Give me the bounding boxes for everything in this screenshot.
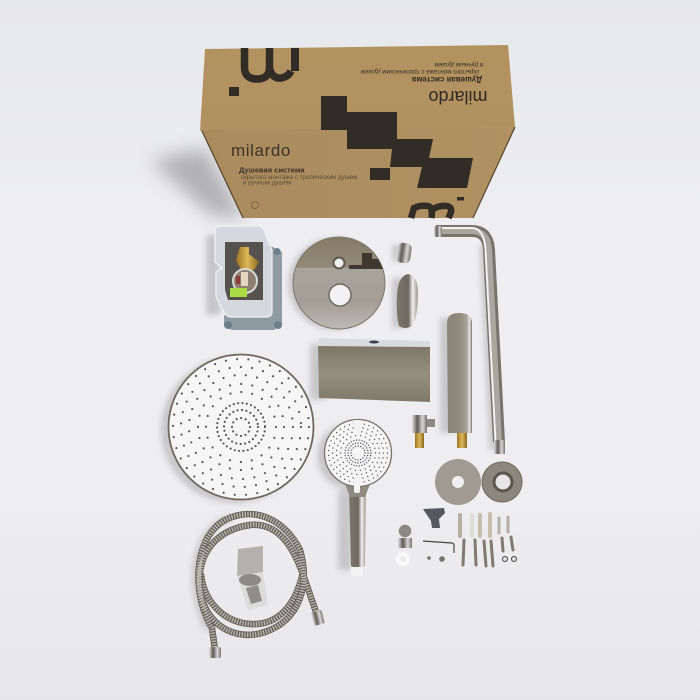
holder chrome reflection: [246, 585, 262, 604]
center plate hole: [329, 284, 351, 306]
plate disc: [293, 237, 385, 329]
mixer handle: [397, 274, 418, 328]
product description second line on flap: и ручным душем: [435, 61, 483, 68]
elbow outlet: [427, 419, 435, 427]
product description on front: скрытого монтажа с тропическим душем: [241, 174, 357, 181]
hand shower wall holder: [237, 546, 268, 610]
pixel pattern on box: [321, 96, 473, 188]
holder body: [237, 572, 268, 610]
plate disc: [435, 459, 481, 505]
wall panel: [318, 338, 430, 402]
box side edges: [202, 127, 515, 218]
small set screw: [427, 556, 431, 560]
pixel square: [370, 168, 390, 180]
corner tabs: [224, 248, 282, 329]
arm tip: [434, 226, 442, 237]
mounting base: [224, 246, 282, 330]
arm mid tone: [436, 231, 499, 442]
head disc: [168, 354, 314, 500]
flange opening: [494, 473, 512, 491]
ball: [398, 524, 412, 538]
slide bar brass nipple: [457, 433, 467, 448]
green level sticker: [230, 288, 247, 297]
product description on flap: скрытого монтажа с тропическим душем: [361, 68, 479, 75]
aerator key: [423, 508, 445, 528]
hand shower tip: [351, 567, 363, 576]
top tab: [354, 420, 360, 434]
hose corrugation: [198, 514, 316, 650]
panel chrome top edge: [318, 338, 430, 348]
hose inner coil corrugation: [201, 572, 303, 624]
wall anchors: [460, 514, 508, 536]
concealed mixer box: [215, 226, 282, 330]
slide bar: [447, 313, 472, 448]
product title on flap: Душевая система: [412, 75, 482, 84]
mixer shadow: [206, 235, 220, 315]
plate hole: [452, 476, 464, 488]
mounting screws: [463, 537, 513, 566]
hand shower nozzles: [328, 424, 388, 482]
top plate hole: [334, 258, 344, 268]
arm pipe: [436, 231, 499, 442]
flexible shower hose: [198, 514, 316, 650]
brand name on flap: milardo: [428, 87, 488, 107]
washers: [502, 556, 516, 562]
brass valve: [236, 247, 259, 270]
hose shadow: [195, 517, 232, 630]
part shadows: [161, 238, 494, 570]
box top flap: [200, 45, 515, 131]
allen key: [423, 541, 454, 553]
round flange: [482, 462, 522, 502]
overhead shower arm: [434, 226, 505, 454]
small round plate: [435, 459, 481, 505]
red cap detail: [236, 276, 240, 284]
product description second line on front: и ручным душем: [243, 180, 291, 186]
panel slot: [369, 340, 379, 344]
panel body: [318, 346, 430, 402]
hand shower handle: [349, 488, 366, 568]
bottom tab: [354, 476, 360, 493]
box front face: [201, 127, 515, 218]
logo m on front: [411, 206, 451, 218]
chrome ball joint: [398, 524, 412, 548]
hose end nut right: [311, 610, 325, 626]
reflected box pattern: [349, 253, 383, 269]
brand name on front: milardo: [231, 141, 291, 160]
cartridge: [233, 269, 257, 293]
logo right leg on flap: [291, 48, 299, 71]
logo dot on front: [457, 197, 464, 200]
slide bar body: [447, 313, 472, 433]
cartridge core: [241, 272, 248, 286]
hand shower: [324, 420, 392, 576]
large rain shower head: [168, 354, 314, 500]
ball collar: [398, 538, 412, 548]
hose end nut left: [209, 647, 221, 658]
wall elbow: [412, 415, 435, 448]
product title on front: Душевая система: [239, 166, 305, 174]
elbow brass nipple: [415, 433, 424, 448]
flange ring: [482, 462, 522, 502]
mixer interior: [225, 242, 263, 300]
certification mark: [252, 202, 258, 208]
elbow body: [412, 415, 427, 433]
hose dark body: [198, 514, 316, 650]
arm collar: [494, 440, 505, 454]
logo dot on flap: [229, 87, 239, 96]
hose inner coil body: [201, 572, 303, 624]
hand shower head disc: [324, 420, 392, 486]
chrome knob: [396, 242, 412, 264]
transparent cover: [215, 226, 272, 317]
box shadow: [150, 148, 245, 218]
small nut: [439, 556, 445, 562]
holder detail: [239, 574, 261, 586]
round escutcheon plate: [293, 237, 385, 329]
holder top: [237, 546, 263, 576]
arm highlight: [438, 228, 496, 442]
logo m upside down on flap: [244, 48, 291, 79]
white ring: [398, 554, 408, 564]
nozzle rings: [173, 359, 309, 495]
cardboard box: [200, 45, 515, 218]
hand shower neck: [345, 484, 370, 497]
